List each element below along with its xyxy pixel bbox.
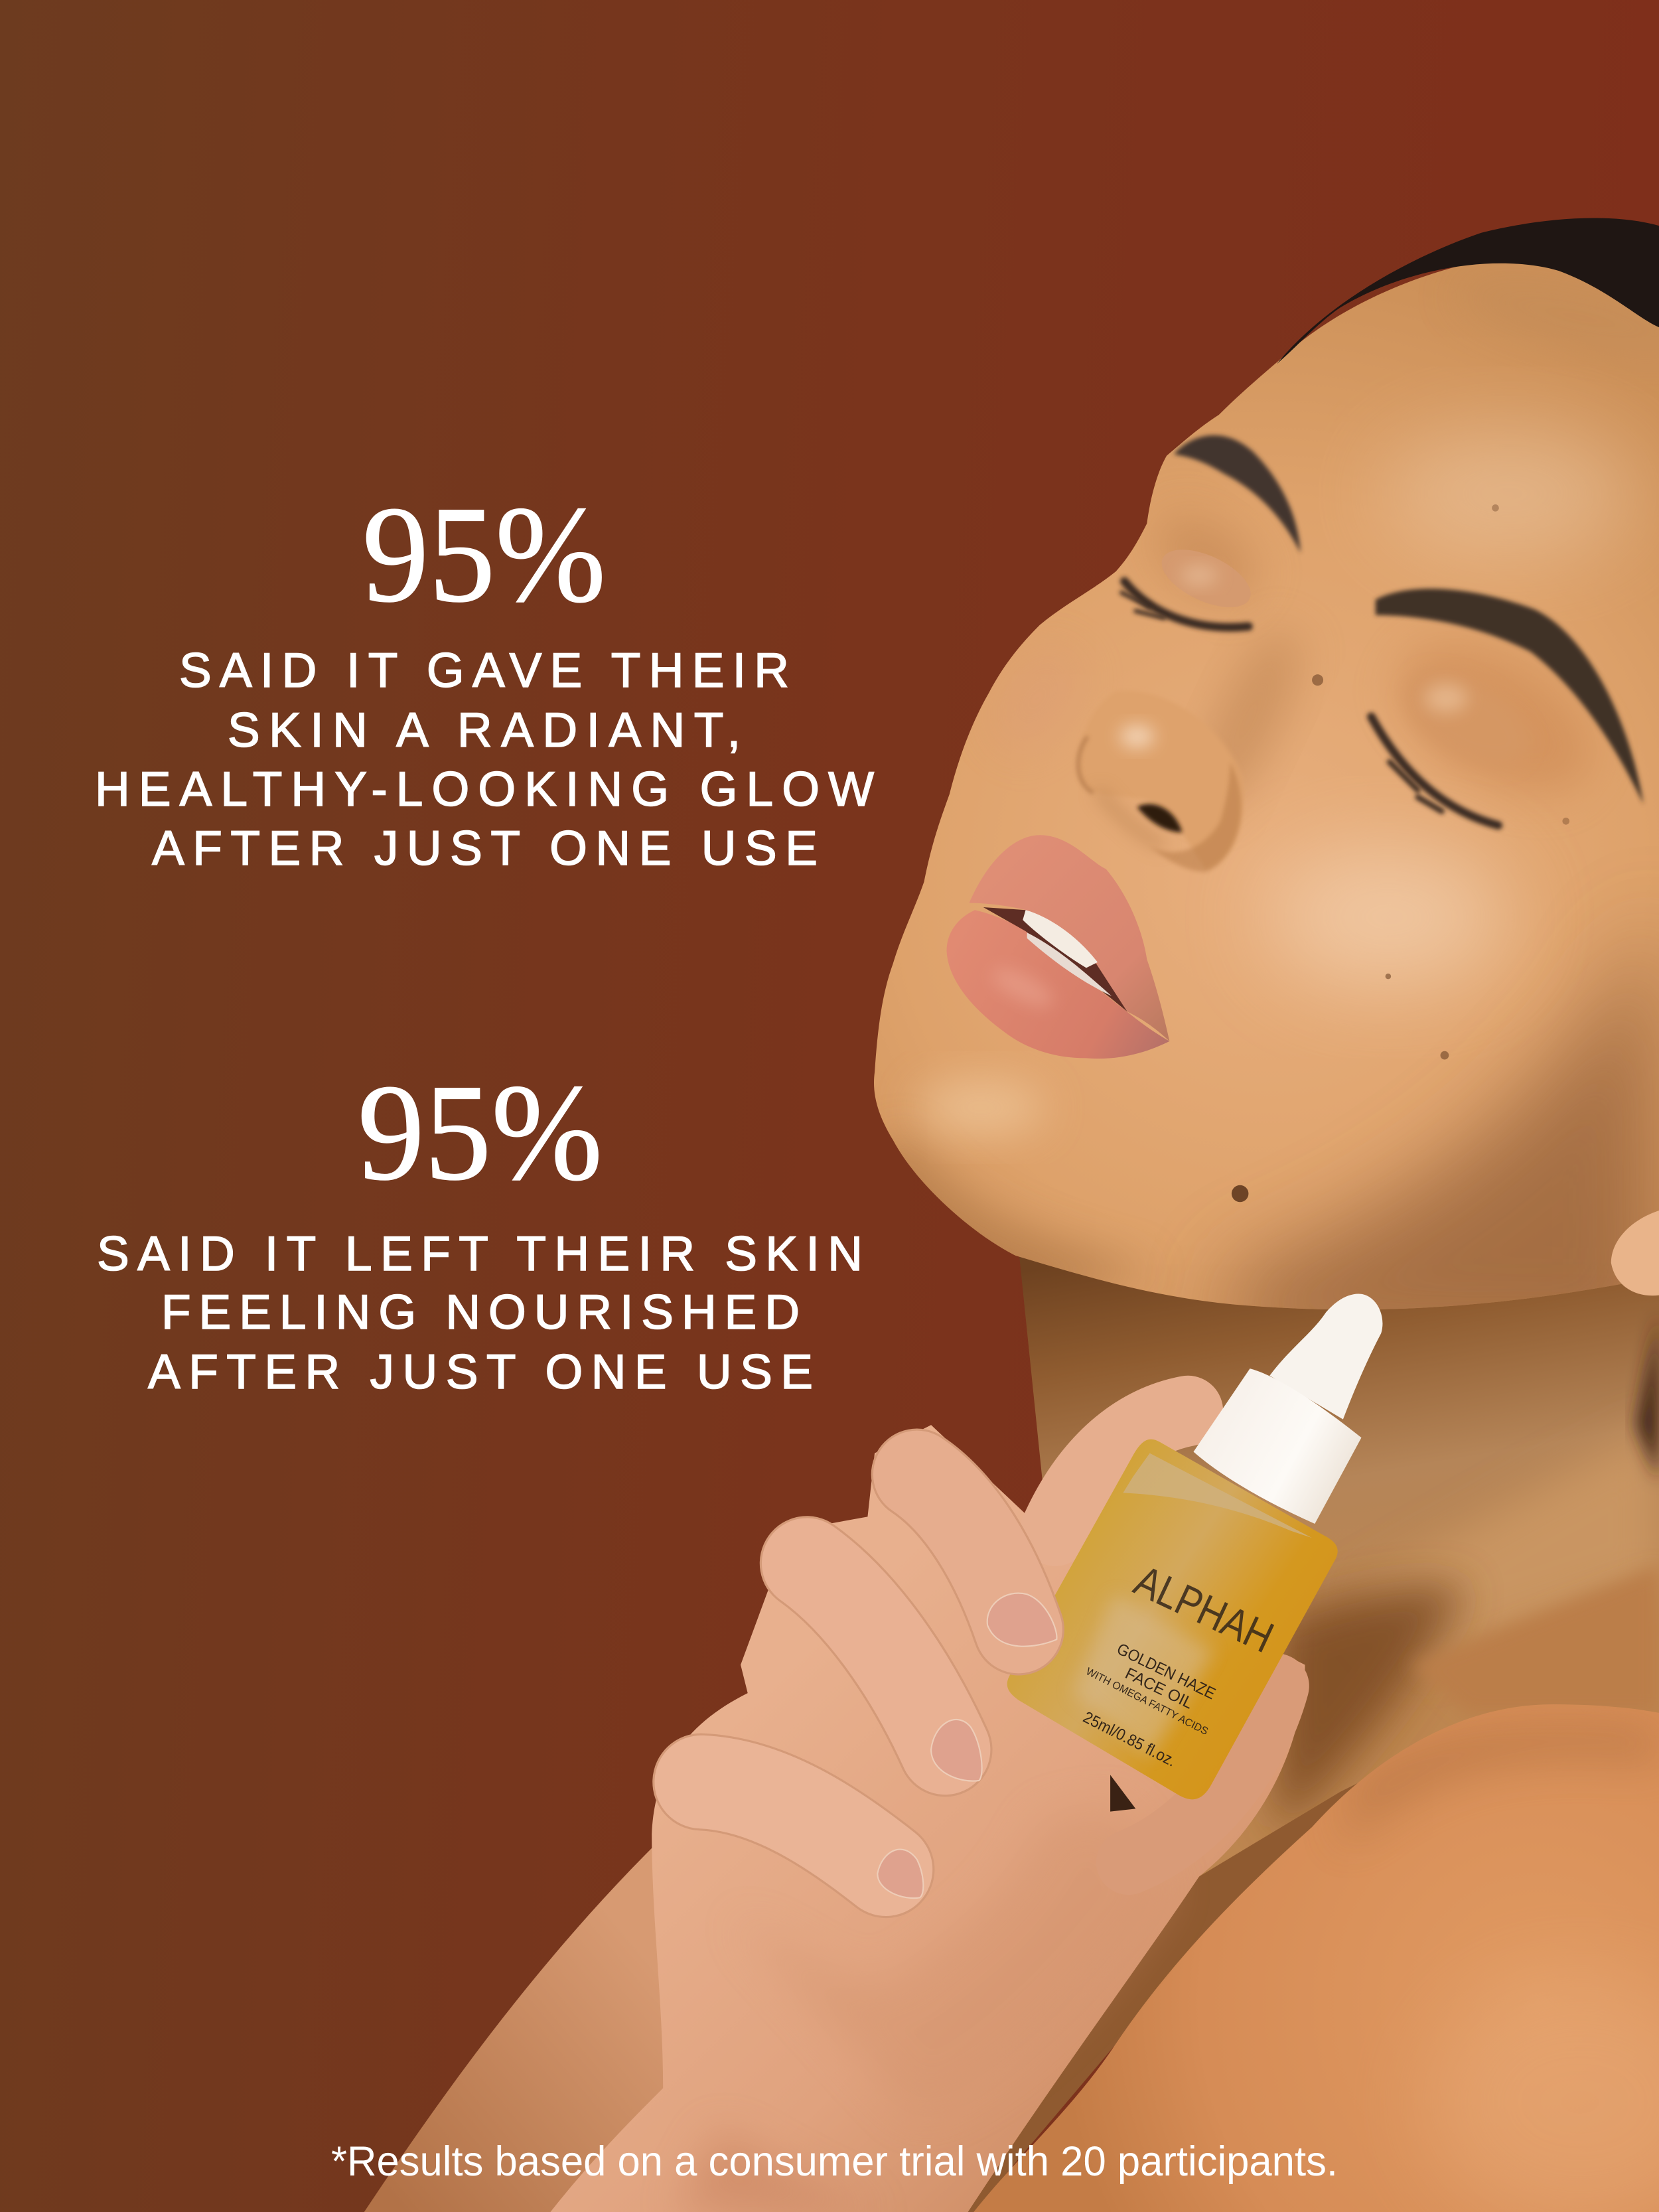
- ring finger: [701, 1782, 886, 1870]
- glass body with oil: [1007, 1439, 1338, 1799]
- ear: [1611, 1211, 1659, 1295]
- face shading and highlights: [847, 261, 1659, 1355]
- moles: [1232, 504, 1569, 1202]
- index finger: [917, 1475, 1019, 1629]
- stat 2 description: [97, 1227, 863, 1399]
- product bottle: [1007, 1293, 1382, 1799]
- stat 1 description: [95, 644, 874, 875]
- dropper bulb: [1269, 1293, 1382, 1420]
- stat block 1: [95, 478, 874, 875]
- stat 1 description: SKIN A RADIANT,: [228, 703, 741, 757]
- nose: [1078, 691, 1244, 872]
- thumb behind bottle: [1129, 1686, 1277, 1862]
- stat 1 description: SAID IT GAVE THEIR: [179, 644, 789, 698]
- right closed eye: [1371, 654, 1544, 826]
- product name line 1: GOLDEN HAZE: [1114, 1640, 1218, 1703]
- hand and palm: [550, 1411, 1305, 2212]
- portrait illustration: [364, 218, 1659, 2212]
- shoulder: [974, 1704, 1659, 2212]
- product name line 2: FACE OIL: [1122, 1664, 1196, 1713]
- shadow between hand and shoulder: [903, 1728, 1467, 2212]
- stat 1 description: AFTER JUST ONE USE: [152, 822, 818, 875]
- right eyebrow: [1376, 589, 1644, 804]
- brand name: ALPHAH: [1127, 1556, 1281, 1662]
- stat 1 number: 95%: [362, 478, 606, 630]
- arm: [364, 1834, 677, 2212]
- bottle label text: [1080, 1556, 1281, 1771]
- fingernails: [877, 1593, 1056, 1898]
- stat 1 description: HEALTHY-LOOKING GLOW: [95, 763, 874, 816]
- dropper collar: [1194, 1368, 1361, 1524]
- top finger behind bottle: [1055, 1411, 1188, 1531]
- neck and collarbone: [1019, 1242, 1659, 1905]
- footnote: *Results based on a consumer trial with 20 participants.: [331, 2138, 1338, 2185]
- product subtitle: WITH OMEGA FATTY ACIDS: [1084, 1666, 1210, 1737]
- left eyebrow: [1174, 435, 1301, 553]
- middle finger: [807, 1563, 945, 1749]
- stat block 2: [97, 1056, 863, 1399]
- lips: [946, 835, 1169, 1059]
- face: [847, 218, 1659, 1355]
- stat 2 number: 95%: [358, 1056, 603, 1209]
- stat 2 description: SAID IT LEFT THEIR SKIN: [97, 1227, 863, 1281]
- foreground fingers: [701, 1475, 1019, 1870]
- hair: [1277, 218, 1659, 364]
- stat 2 description: FEELING NOURISHED: [161, 1286, 800, 1339]
- volume: 25ml/0.85 fl.oz.: [1080, 1708, 1179, 1771]
- stat 2 description: AFTER JUST ONE USE: [148, 1345, 813, 1399]
- left closed eye: [1121, 538, 1260, 627]
